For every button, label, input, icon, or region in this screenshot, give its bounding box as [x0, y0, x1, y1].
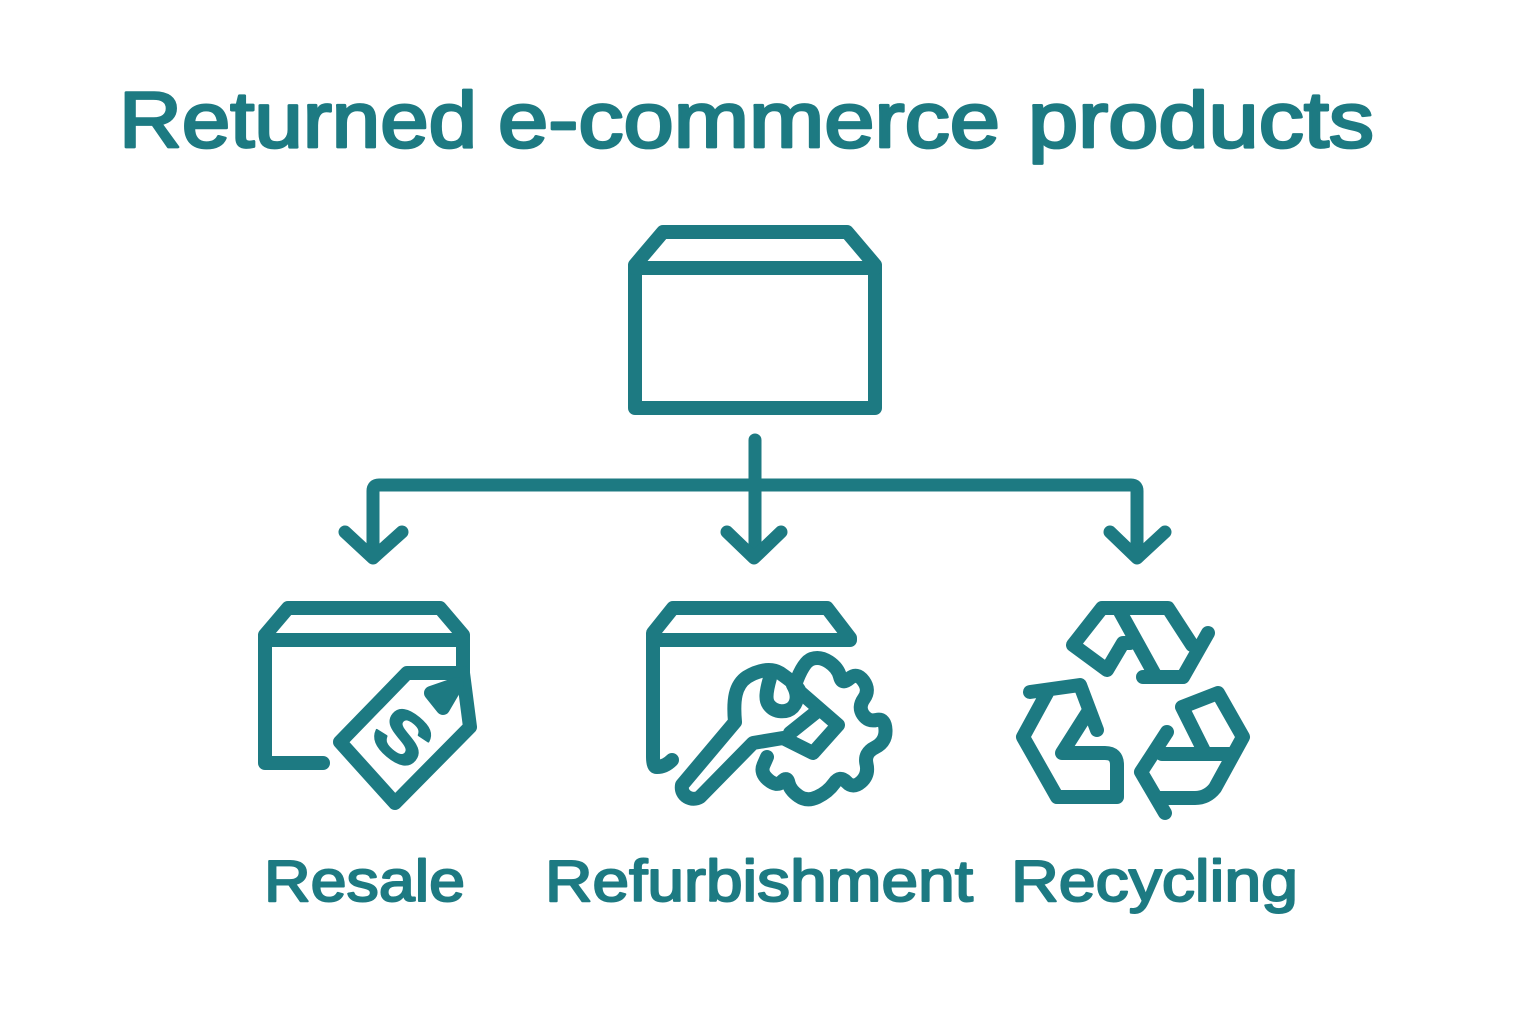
wrench	[682, 670, 838, 799]
title: e-commerce	[498, 75, 1000, 164]
label: recycling: Recycling	[1011, 849, 1298, 914]
recycling arrow: left	[1023, 685, 1117, 797]
icon: returned parcel box	[635, 232, 875, 408]
resale box outline	[265, 608, 463, 763]
price tag letter: S	[357, 690, 449, 784]
title: products	[1028, 75, 1374, 164]
label: resale: Resale	[264, 849, 465, 914]
gear	[762, 658, 886, 799]
icon: recycling symbol	[1023, 608, 1243, 813]
price tag	[340, 673, 470, 803]
recycling arrow: right	[1141, 693, 1243, 813]
label: refurbishment: Refurbishment	[545, 849, 973, 914]
refurbishment box outline	[653, 608, 850, 767]
price tag hole	[431, 684, 457, 708]
icon: resale box with price tag	[265, 608, 470, 803]
wrench jaw	[766, 678, 815, 733]
recycling arrow: top	[1073, 608, 1208, 677]
icon: refurbishment box with wrench and gear	[653, 608, 886, 799]
title: Returned	[119, 75, 477, 164]
flow arrows splitting into three outcomes	[345, 440, 1165, 558]
